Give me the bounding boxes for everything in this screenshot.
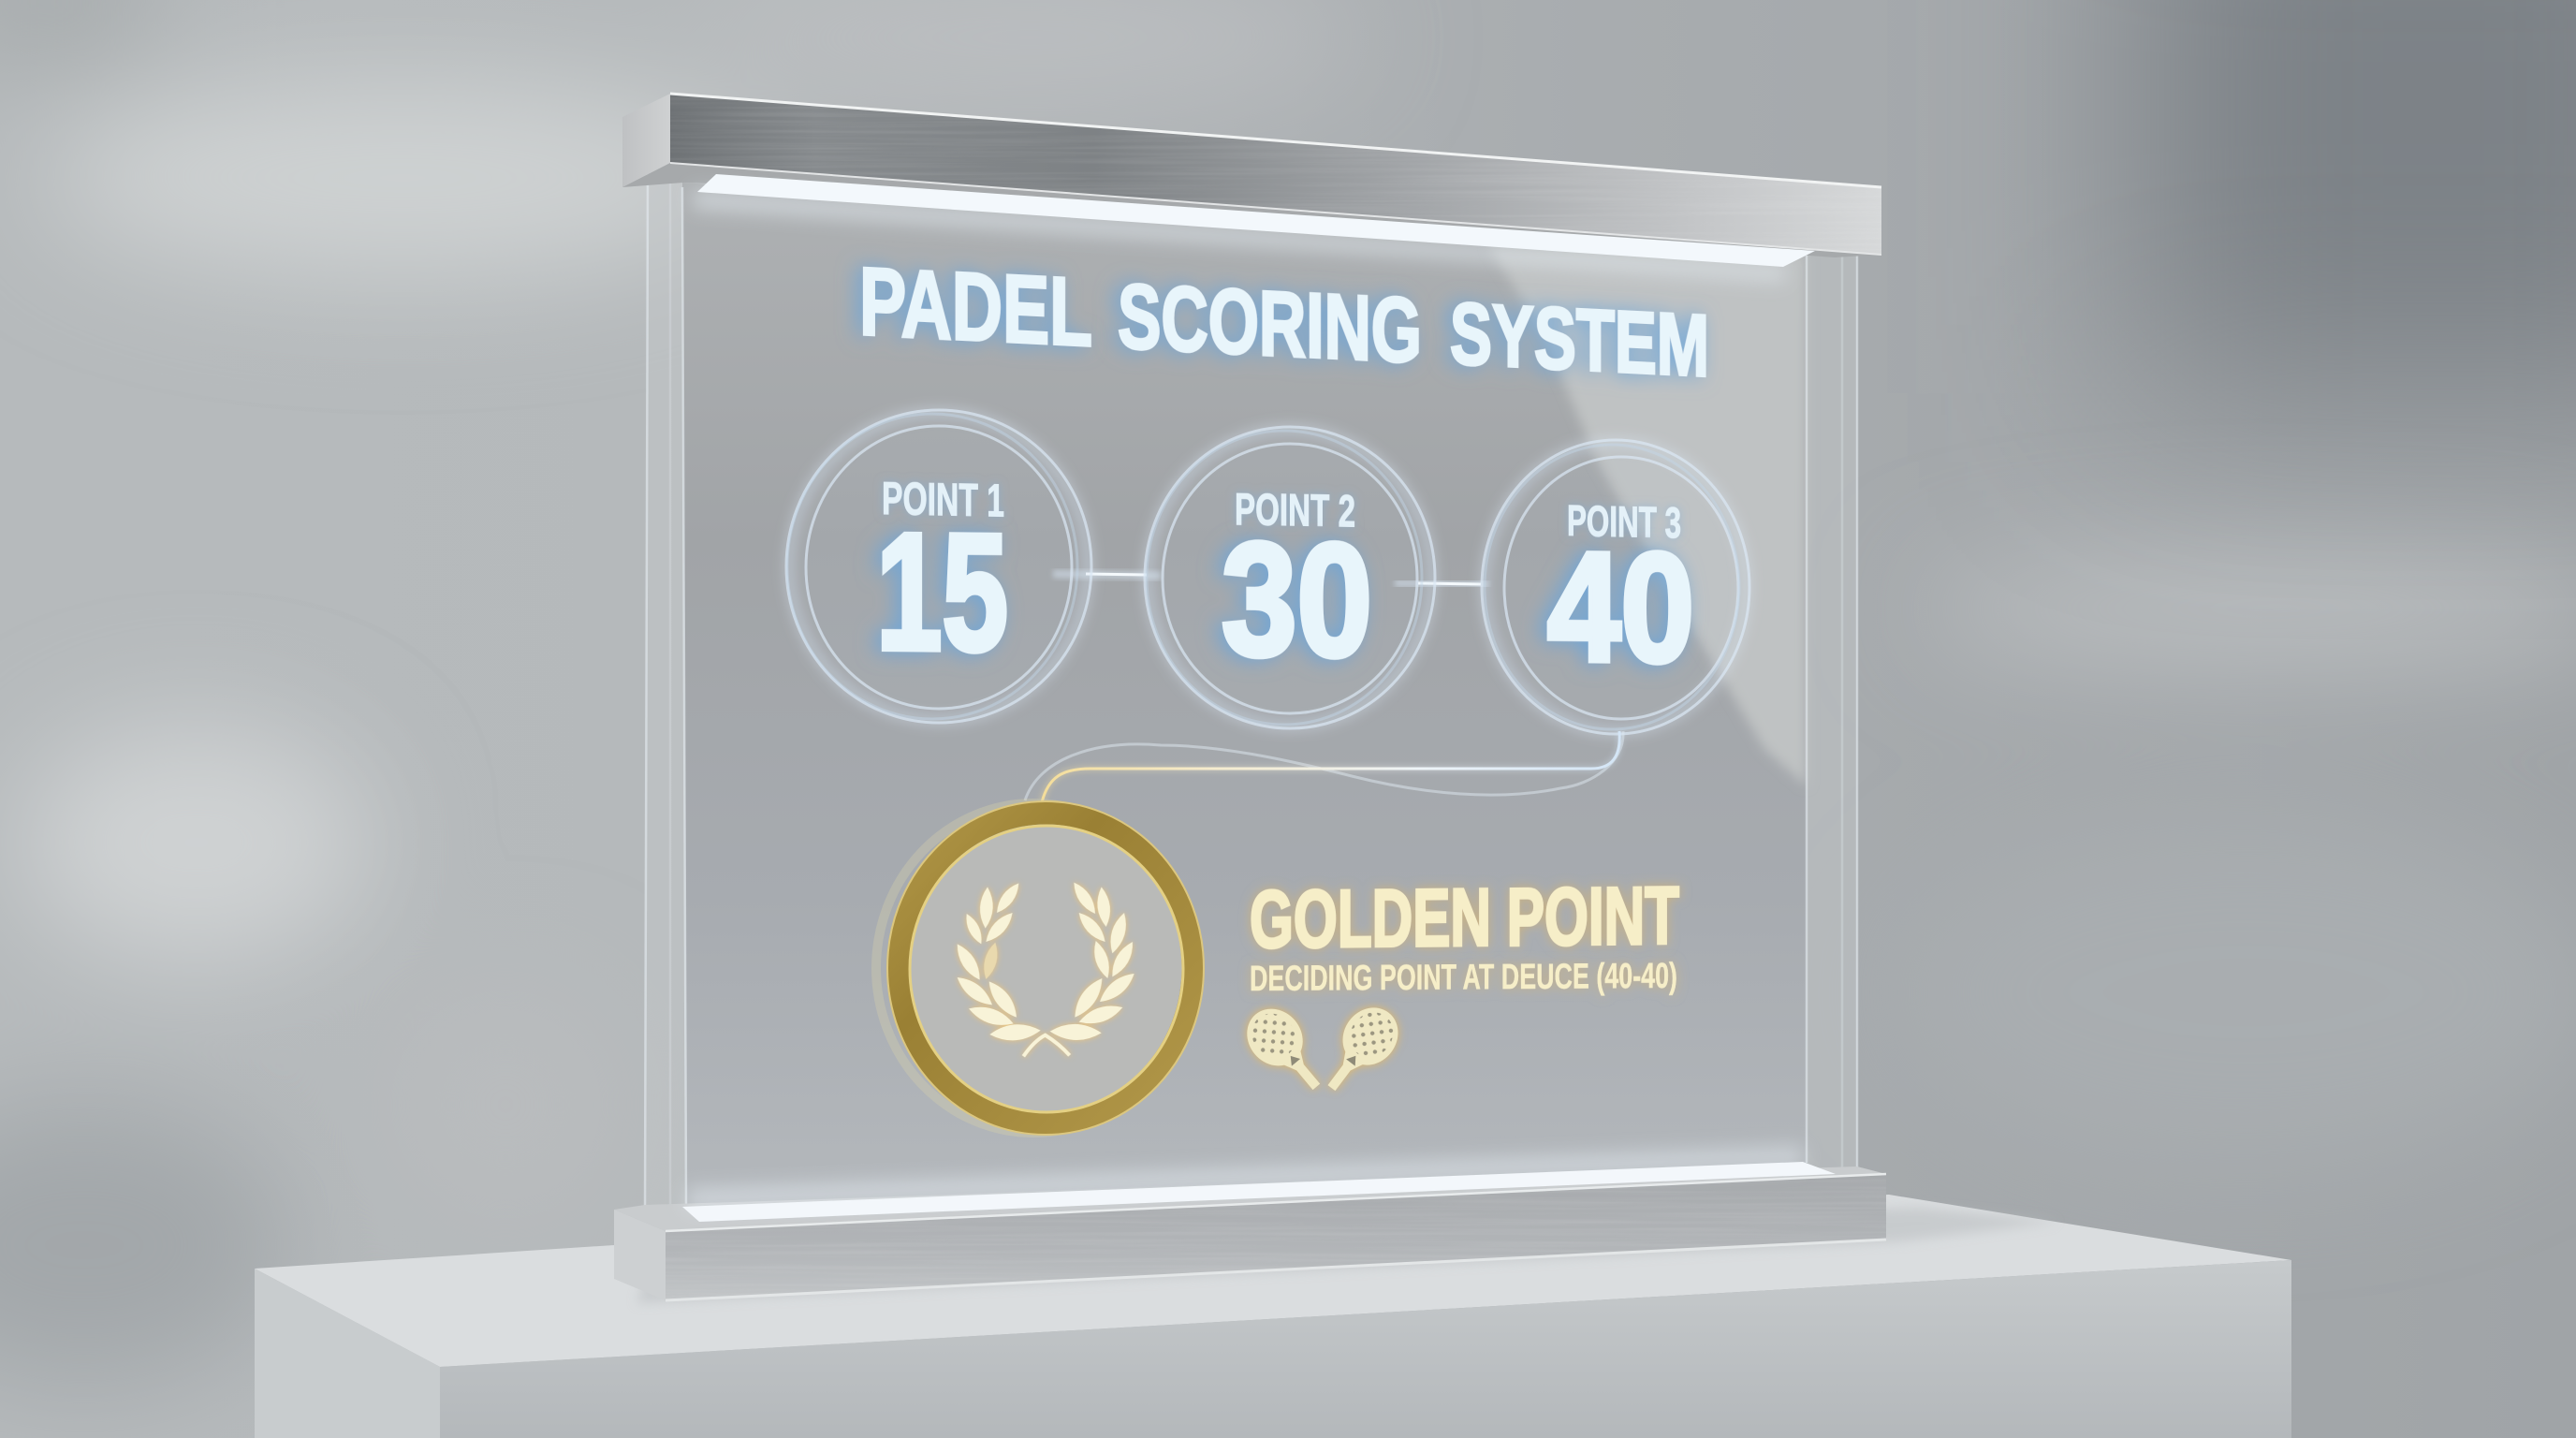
connector: point 1 to point 2: [1053, 574, 1161, 576]
pedestal: [255, 1195, 2291, 1438]
connector: point 2 to point 3: [1395, 583, 1488, 584]
title: [859, 247, 1709, 395]
gold ring with laurel wreath: [876, 801, 1204, 1135]
golden point description: DECIDING POINT AT DEUCE (40-40): [1250, 957, 1677, 999]
number: 30: 30: [1222, 509, 1372, 691]
title: SYSTEM: [1450, 284, 1709, 395]
label: point 2: POINT 2: [1235, 485, 1355, 537]
number: 15: 15: [876, 498, 1008, 685]
number: 40: 40: [1547, 521, 1694, 696]
title: PADEL: [859, 247, 1092, 366]
light patch on glass: [1488, 245, 1807, 786]
circle: point 3: [1482, 440, 1749, 734]
top metal bar: [622, 94, 1881, 281]
label: point 1: POINT 1: [882, 474, 1004, 527]
circle: point 2: [1145, 427, 1435, 728]
bottom metal base: [614, 1147, 1886, 1300]
icon: right racket: [1310, 997, 1410, 1104]
icon: crossed padel rackets: [1236, 997, 1410, 1104]
label: point 3: POINT 3: [1567, 496, 1681, 547]
icon: laurel wreath: [952, 879, 1138, 1056]
glass panel: [645, 173, 1857, 1211]
circle: point 1: [786, 410, 1091, 723]
icon: left racket: [1236, 997, 1337, 1104]
top light strip: [697, 174, 1815, 267]
title: SCORING: [1118, 264, 1422, 382]
connector: curved line from point 3 to golden point: [1025, 731, 1623, 802]
golden point heading: GOLDEN POINT: [1250, 871, 1679, 965]
bottom light strip: [682, 1162, 1836, 1222]
